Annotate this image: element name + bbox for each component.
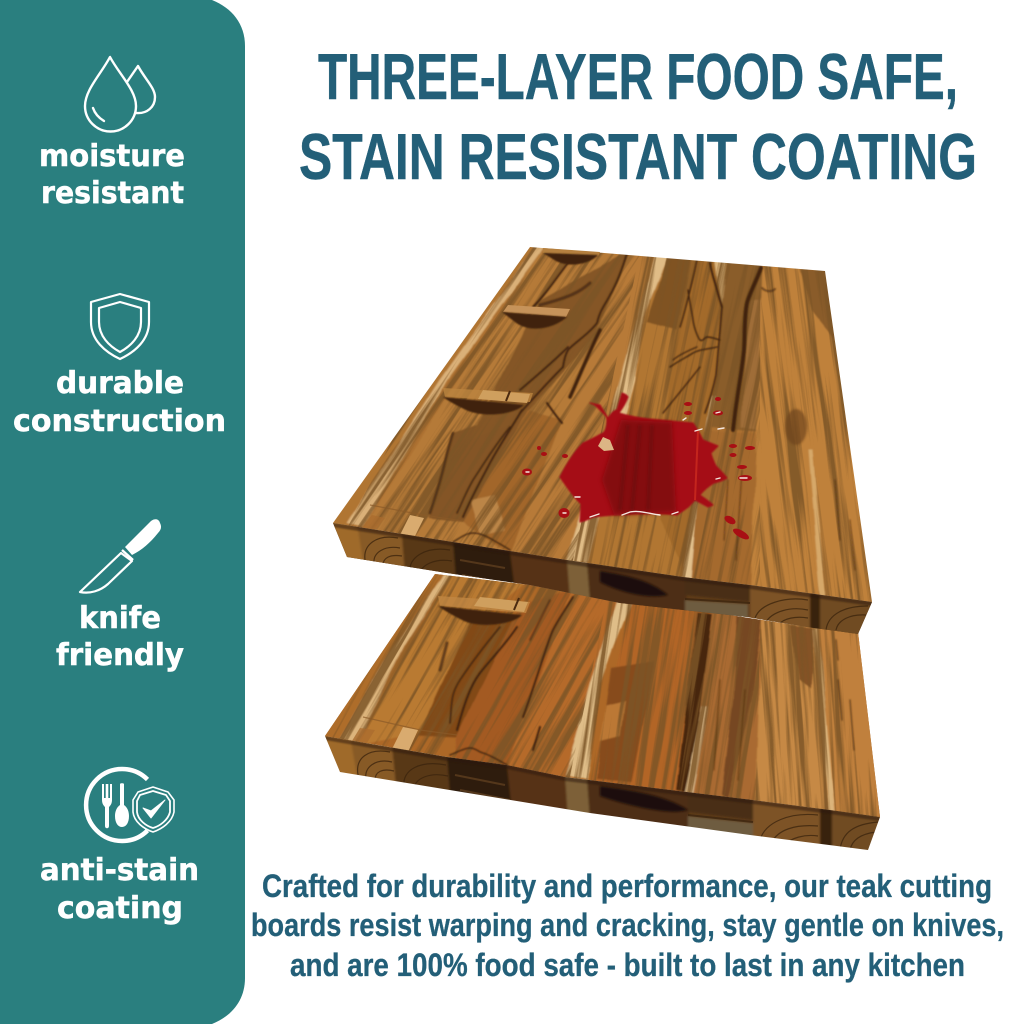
- icon: knife: [80, 519, 161, 593]
- red spill: [522, 393, 755, 542]
- wood grain texture: [348, 247, 872, 602]
- board side edge: [325, 736, 880, 850]
- feature: durable construction: [13, 294, 226, 439]
- label: durable construction: [13, 366, 226, 439]
- description text: [251, 868, 1004, 983]
- notch: [438, 596, 530, 625]
- highlights: [526, 412, 747, 517]
- label: anti-stain coating: coating: [57, 891, 183, 926]
- dark grain streaks: [430, 253, 855, 570]
- label: moisture resistant: moisture: [39, 139, 185, 174]
- label: anti-stain coating: [40, 853, 199, 926]
- panel: teal feature sidebar: [0, 0, 245, 1024]
- board side edge: [333, 523, 872, 634]
- notches: [443, 248, 600, 414]
- icon: cutlery plate with shield check: [86, 769, 174, 841]
- label: anti-stain coating: anti-stain: [40, 853, 199, 888]
- feature: knife friendly: [56, 519, 184, 673]
- label: knife friendly: [56, 601, 184, 673]
- label: moisture resistant: [39, 139, 185, 211]
- juice groove end: [363, 717, 457, 735]
- label: knife friendly: friendly: [56, 638, 184, 673]
- feature: moisture resistant: [39, 57, 185, 211]
- knot: [785, 409, 807, 445]
- label: knife friendly: knife: [79, 601, 161, 636]
- droplets: [522, 397, 755, 542]
- dark grain streaks: [440, 597, 854, 780]
- label: durable construction: durable: [56, 366, 184, 401]
- product photo: upper teak cutting board with red spill: [325, 247, 880, 850]
- icon: shield: [91, 294, 149, 359]
- label: moisture resistant: resistant: [41, 176, 184, 211]
- icon: water drops: [85, 57, 155, 132]
- board top face: [325, 247, 880, 817]
- product photo: lower teak cutting board: [325, 574, 880, 850]
- feature: anti-stain coating: [40, 769, 199, 926]
- label: durable construction: construction: [13, 404, 226, 439]
- title: [299, 40, 977, 193]
- board top face: [333, 247, 872, 634]
- juice groove end: [370, 504, 419, 514]
- wood grain texture: [332, 574, 880, 816]
